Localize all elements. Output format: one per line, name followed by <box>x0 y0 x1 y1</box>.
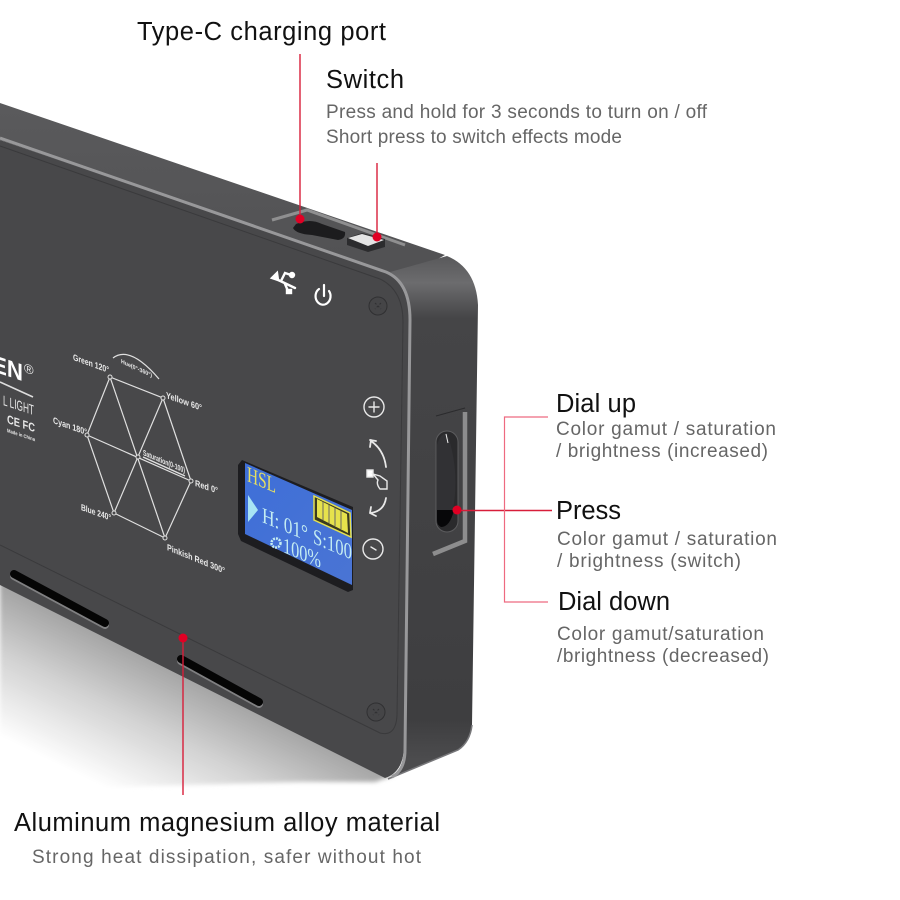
callout: press <box>452 506 552 514</box>
text block: dial up: Dial up <box>556 390 636 418</box>
text block: alloy material <box>14 809 440 868</box>
screws <box>367 297 387 721</box>
lcd readouts: HSL <box>247 462 276 498</box>
text block: switch <box>326 66 708 148</box>
text block: dial up <box>556 390 776 462</box>
panel front face <box>0 140 409 778</box>
text block: dial down <box>557 588 769 667</box>
text block: dial down: Color gamut/saturation <box>557 624 764 645</box>
logo text <box>0 351 35 443</box>
icon: down arrow <box>370 498 386 516</box>
usb-c port <box>293 221 345 240</box>
text block: press: Color gamut / saturation <box>557 529 777 550</box>
icon: minus <box>363 539 383 559</box>
lcd readouts: H: 01° <box>262 503 308 546</box>
text block: dial up: Color gamut / saturation <box>556 419 776 440</box>
text block: press: / brightness (switch) <box>557 551 741 572</box>
callout: switch <box>372 163 382 242</box>
hexagon labels: Pinkish Red 300° <box>167 542 225 576</box>
switch button <box>347 233 385 252</box>
hexagon labels: Yellow 60° <box>166 390 202 413</box>
hexagon vertices <box>85 375 193 540</box>
hexagon labels: Cyan 180° <box>53 415 87 437</box>
heading: type-c charging port: Type-C charging port <box>137 18 386 46</box>
text block: dial down: /brightness (decreased) <box>557 646 769 667</box>
side face lower rim <box>388 725 472 779</box>
hexagon labels: Blue 240° <box>81 502 111 523</box>
vent slots <box>14 574 259 704</box>
callout: dial bracket <box>504 417 548 602</box>
logo text: Made in China <box>7 428 35 443</box>
text block: switch: Short press to switch effects mode <box>326 127 622 148</box>
face inset line <box>0 146 403 734</box>
icon: power <box>316 285 331 305</box>
hexagon labels: Red 0° <box>195 478 218 496</box>
panel side face <box>388 256 478 779</box>
icon: plus <box>364 397 384 417</box>
text block: press <box>556 497 777 572</box>
dial wheel <box>433 408 465 554</box>
callout: alloy <box>178 634 188 795</box>
text block: alloy material: Aluminum magnesium alloy material <box>14 809 440 837</box>
lcd readouts <box>247 462 352 573</box>
hexagon lines <box>87 354 191 538</box>
text block: switch: Press and hold for 3 seconds to turn on / off <box>326 102 708 123</box>
text block: press: Press <box>556 497 621 525</box>
lcd screen <box>238 460 353 592</box>
hexagon labels <box>53 352 225 576</box>
icon: up arrow <box>370 440 386 467</box>
lcd readouts: S:100 <box>313 524 352 565</box>
lcd battery icon <box>314 496 351 537</box>
hexagon labels: Green 120° <box>73 352 109 375</box>
hexagon labels: Hue(0°-360°) <box>121 357 152 379</box>
silver bevel <box>0 138 410 777</box>
logo text: ® <box>24 360 34 378</box>
light panel body <box>0 103 478 779</box>
hue saturation hexagon diagram <box>53 352 225 576</box>
icon: hand <box>367 470 387 489</box>
lcd readouts: 100% <box>283 533 321 573</box>
text block: alloy material: Strong heat dissipation, safer without hot <box>32 847 422 868</box>
red callout lines <box>178 54 552 795</box>
logo text: CE FC <box>7 412 35 435</box>
text block: dial down: Dial down <box>558 588 670 616</box>
panel top edge <box>0 103 445 280</box>
icon: usb symbol <box>272 273 295 293</box>
text block: switch: Switch <box>326 66 404 94</box>
charging port and switch recess <box>272 210 405 252</box>
text block: dial up: / brightness (increased) <box>556 441 768 462</box>
logo text: L LIGHT <box>3 393 34 419</box>
hexagon labels: Saturation(0-100) <box>143 447 185 475</box>
callout: type-c <box>296 54 304 224</box>
shadow under the light panel <box>0 580 395 790</box>
control icons <box>363 397 387 559</box>
